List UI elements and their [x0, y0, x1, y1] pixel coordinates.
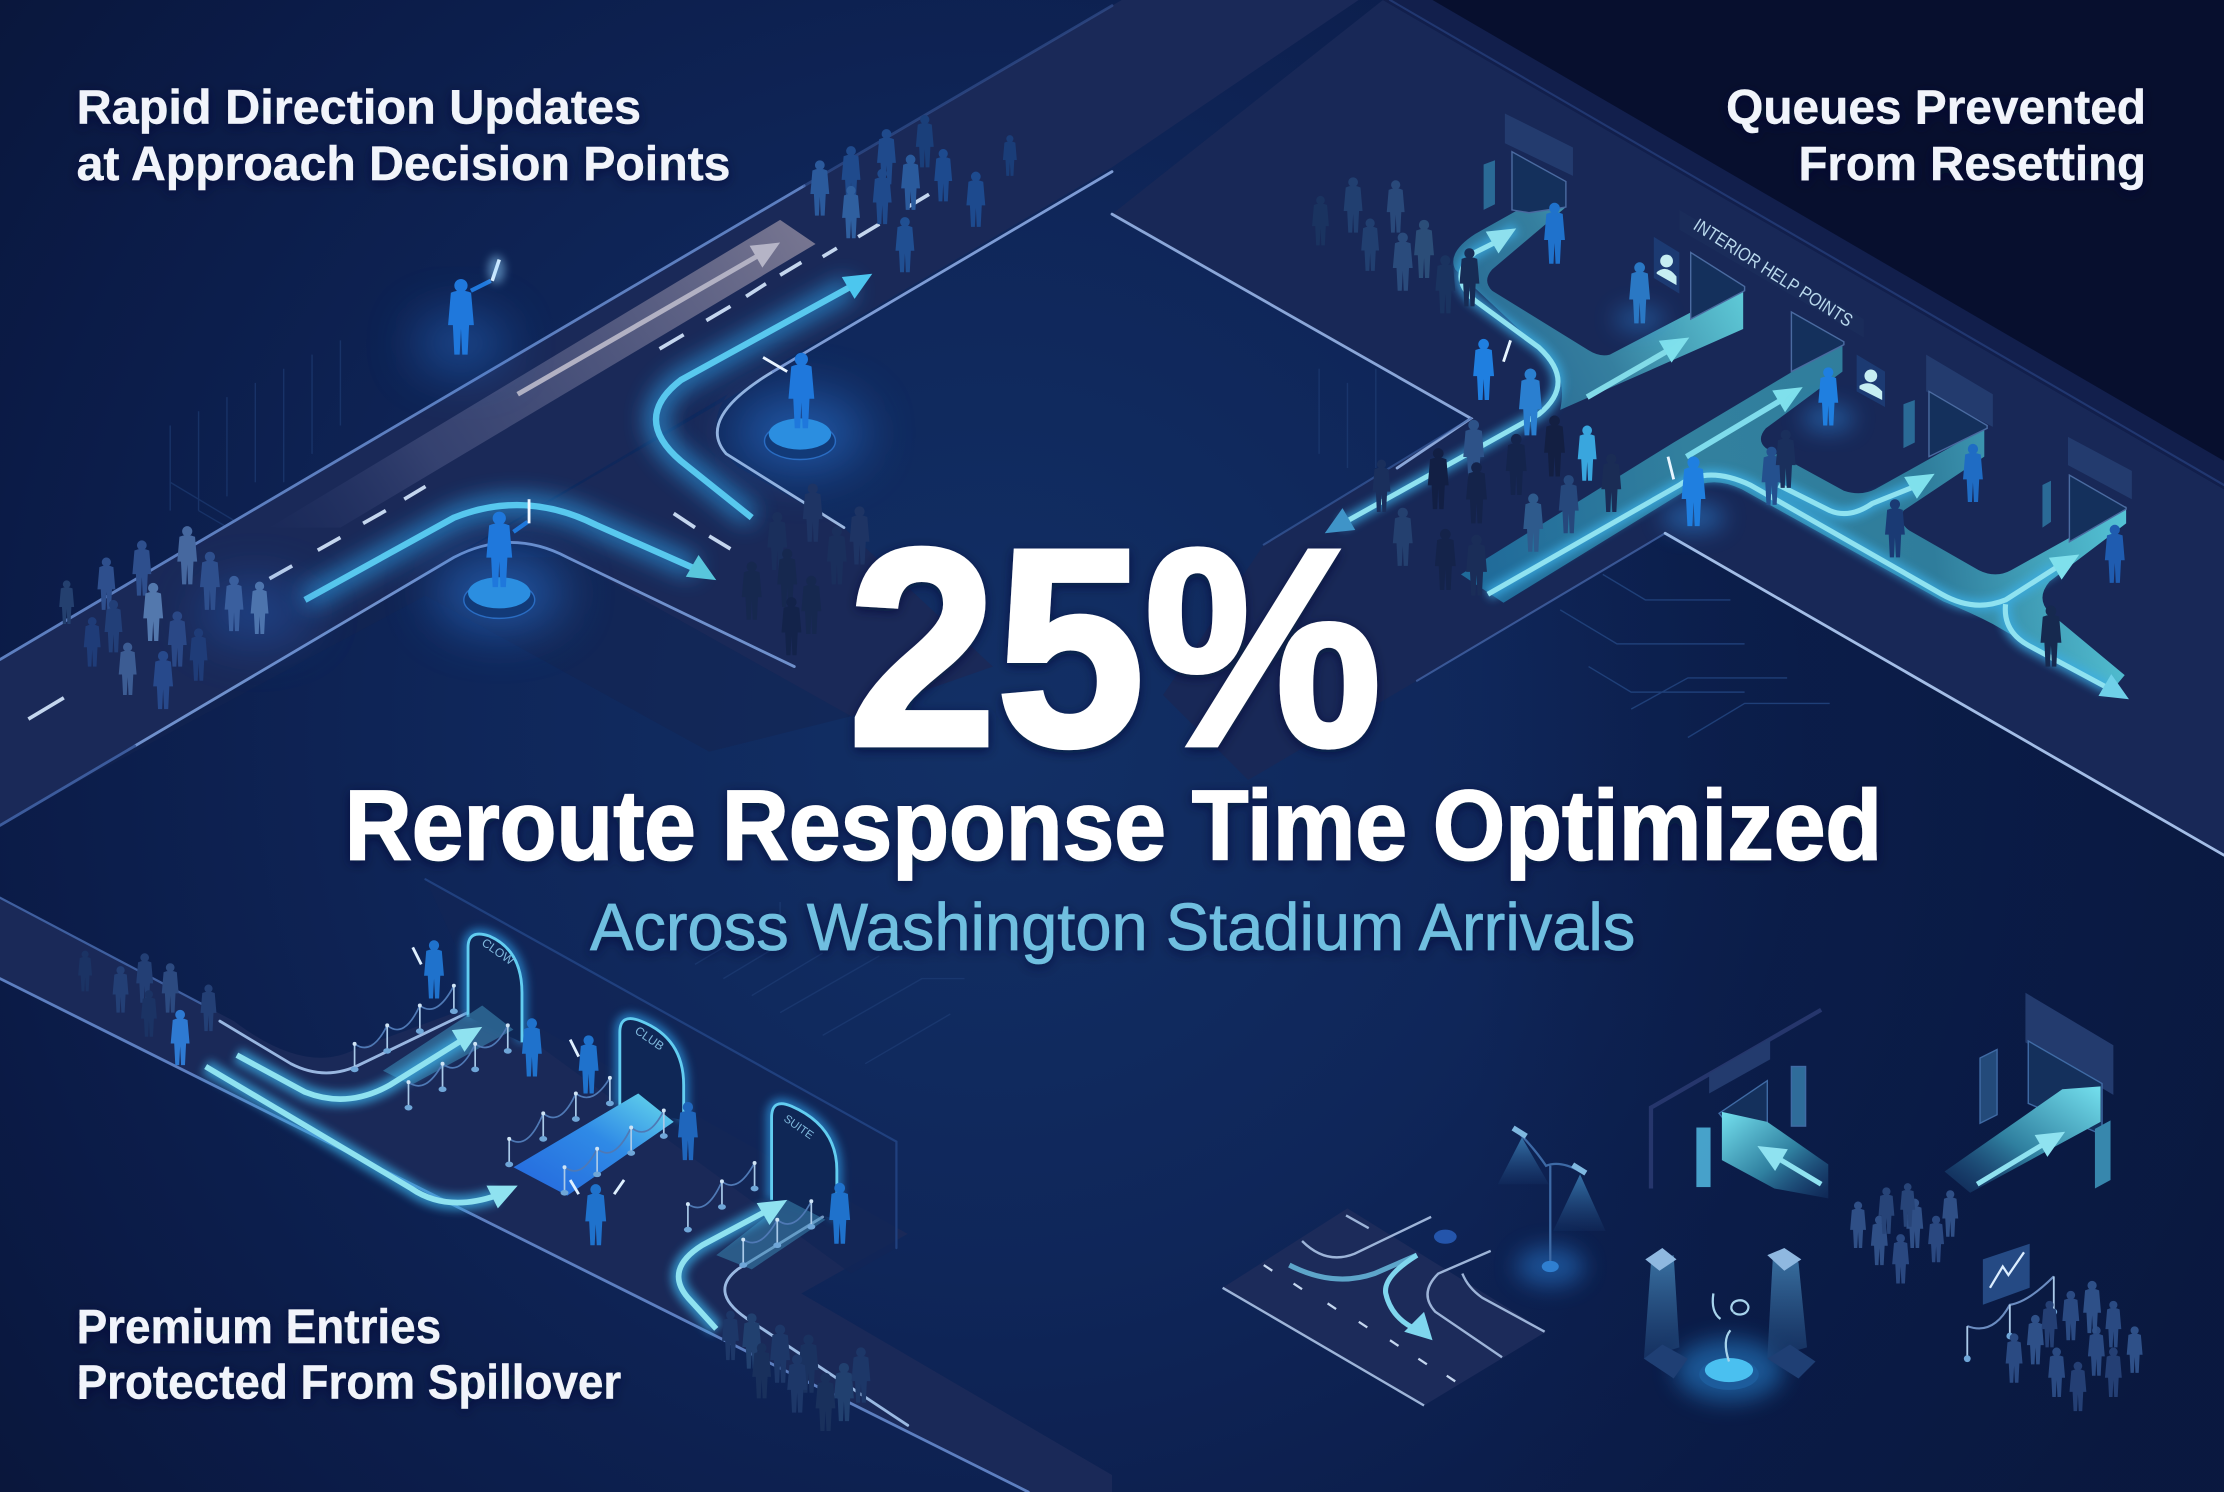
- arrow: premium route c: [679, 1200, 787, 1329]
- crowd: interior upper queue: [1312, 177, 1479, 313]
- arrow: premium route b: [206, 1067, 518, 1208]
- arrow: premium route a: [237, 1027, 482, 1099]
- staff: interior guides: [1473, 203, 2125, 667]
- staff: premium gates: [171, 940, 850, 1245]
- label: queues prevented: From Resetting: [1798, 137, 2146, 191]
- icon: fountain between light pillars: [1644, 1248, 1816, 1401]
- faint circuit patterns: [170, 340, 1376, 1064]
- lane dashes: [28, 194, 929, 719]
- title: Reroute Response Time Optimized: [345, 770, 1882, 881]
- label: premium entries: Premium Entries: [77, 1300, 441, 1354]
- subtitle: Across Washington Stadium Arrivals: [590, 891, 1635, 965]
- crowd: upper road: [810, 115, 1017, 272]
- arrow: door 3: [1686, 387, 1803, 457]
- label: premium entries: Protected From Spillover: [77, 1355, 621, 1409]
- lit floor: door 1 and door 2: [1453, 183, 1743, 410]
- arrow: interior exit route: [1325, 228, 1558, 533]
- door 1: [1484, 113, 1573, 213]
- crowd: bottom road: [722, 1311, 870, 1431]
- road edge lines: [0, 6, 1112, 825]
- scene: left entrance: [1651, 1010, 1828, 1198]
- icon: help point portrait 2: [1857, 355, 1885, 407]
- label: rapid direction updates: Rapid Direction Updates: [77, 80, 641, 134]
- label: queues prevented: Queues Prevented: [1726, 80, 2146, 134]
- scene: right entrance: [1945, 993, 2113, 1193]
- door 5: [2042, 437, 2132, 542]
- arrow: gray closed lane: [518, 243, 780, 394]
- sign: interior help points: INTERIOR HELP POINTS: [1690, 214, 1857, 331]
- gate: suite: SUITE: [781, 1113, 816, 1142]
- crowd: interior queue: [1373, 415, 1621, 596]
- crowd: plaza lower: [2006, 1281, 2143, 1411]
- lit floor: door 3, 4, 5 branches: [1461, 342, 2126, 692]
- corridor edge lines: [1112, 0, 2224, 855]
- crowd: premium approach: [78, 951, 216, 1037]
- traffic controller: lower curve with disc: [434, 499, 565, 630]
- stanchions and ropes: [351, 984, 815, 1268]
- door 4: [1903, 355, 1993, 457]
- arrow: main lit route with branches: [1488, 474, 2129, 699]
- label: rapid direction updates: at Approach Decision Points: [77, 137, 730, 191]
- traffic controller: upper left: [416, 255, 506, 369]
- door 2: [1691, 252, 1745, 319]
- icon: street lamp: [1498, 1126, 1606, 1286]
- door 3: [1791, 312, 1844, 372]
- traffic controller: curve with disc: [735, 353, 865, 469]
- gray lane band: [269, 220, 816, 528]
- icon: chart sign with stanchions: [1964, 1244, 2057, 1362]
- big number: 25%: [848, 491, 1381, 805]
- panel: interior concourse: [1112, 0, 2224, 1492]
- arrow: reroute lower curve: [305, 505, 716, 600]
- icon: help point portrait 1: [1654, 237, 1679, 294]
- arrow: door 2: [1587, 338, 1689, 397]
- diamond circuit traces: [1560, 574, 1830, 737]
- lit floor: gate floors: [383, 1006, 825, 1269]
- gate: suite: [772, 1104, 837, 1220]
- gate: club: CLUB: [632, 1023, 667, 1053]
- gate: club: [620, 1019, 684, 1120]
- crowd: entrance plaza: [1850, 1183, 1958, 1284]
- panel: approach road: [0, 0, 1589, 825]
- panel: premium entries floor: [0, 879, 1112, 1492]
- arrow: reroute upper curve: [656, 274, 872, 518]
- crowd: left approach: [59, 526, 312, 709]
- scene: road intersection tile: [1223, 1208, 1546, 1405]
- crowd: mid road, dark: [742, 484, 869, 655]
- gate: clow: CLOW: [479, 936, 517, 968]
- gate: clow: [468, 934, 522, 1042]
